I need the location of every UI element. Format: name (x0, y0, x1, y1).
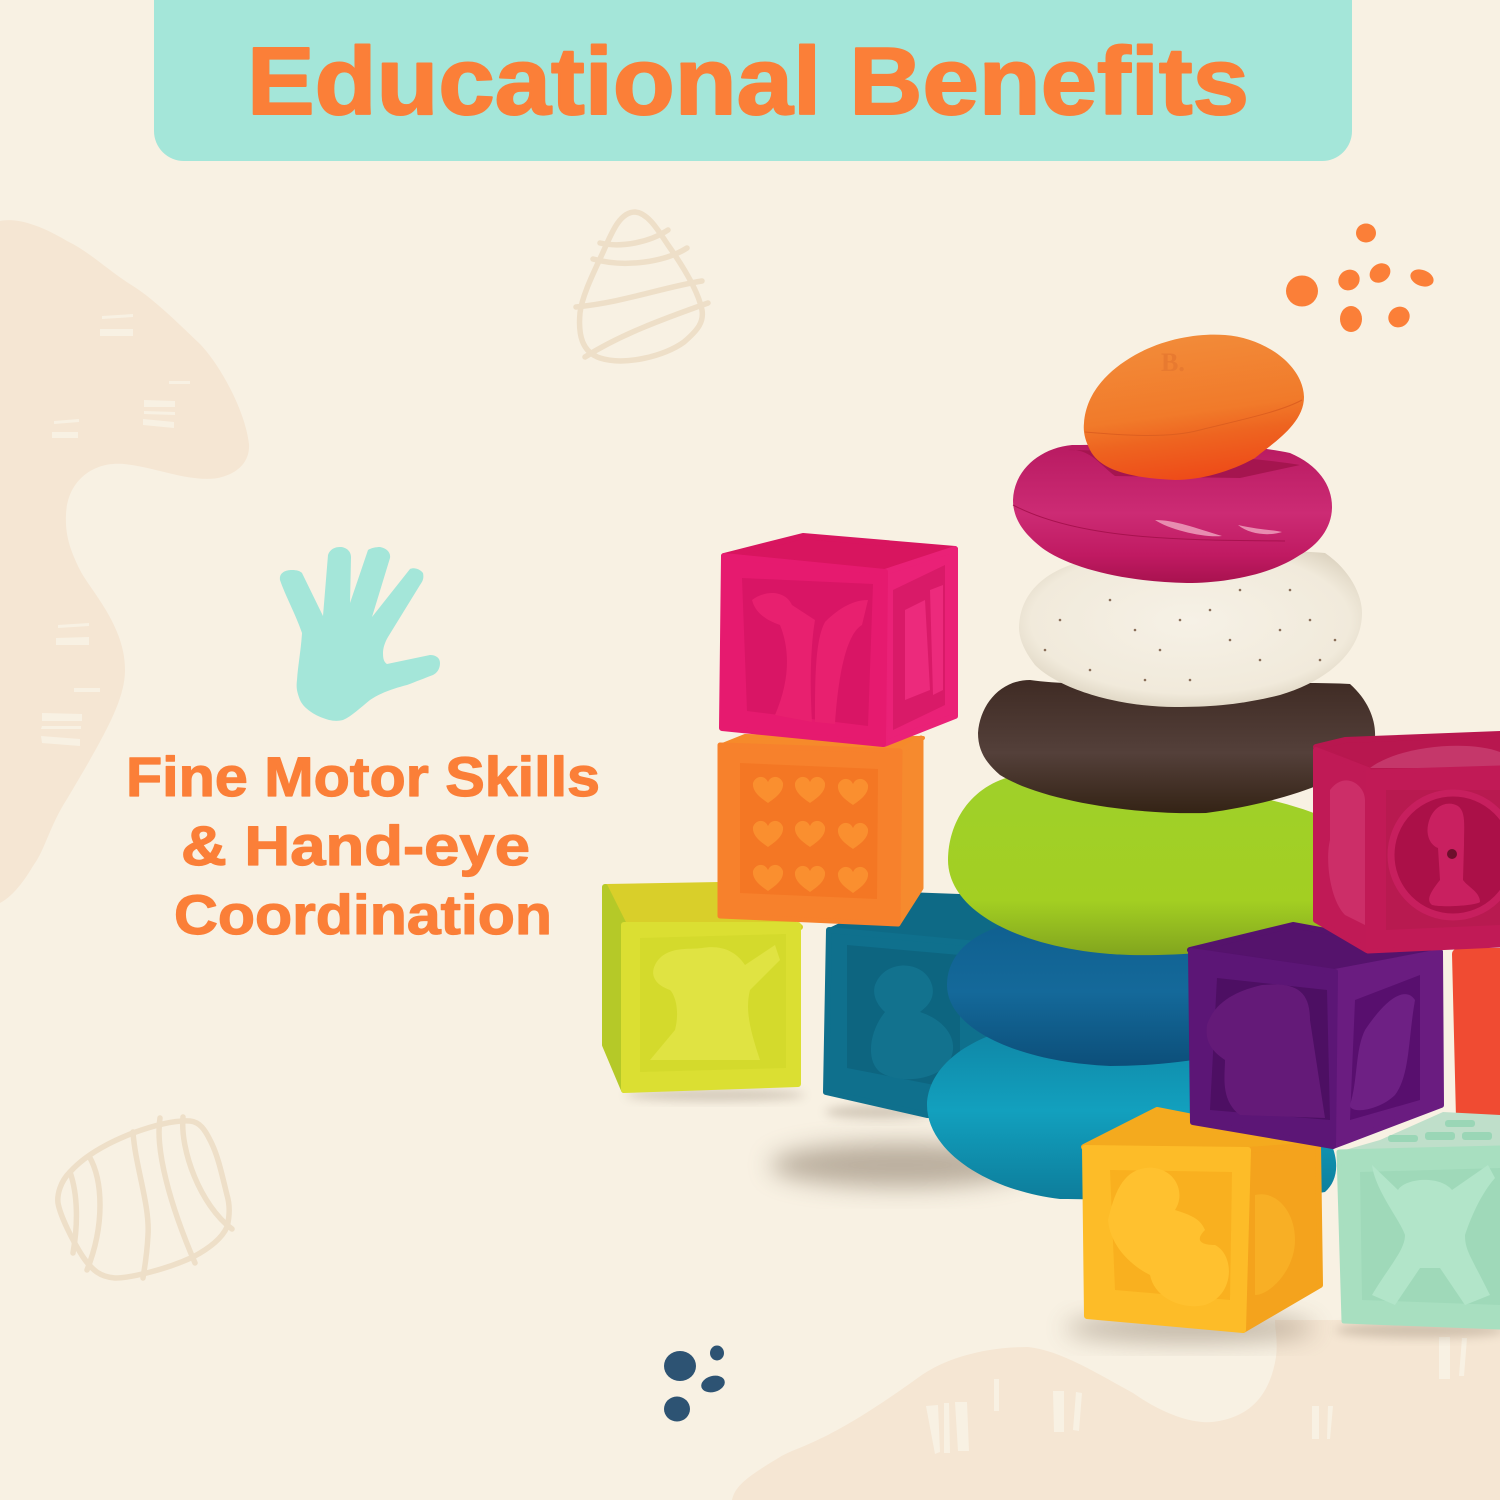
toy: mint bear block (1339, 1112, 1500, 1327)
dots: navy cluster (664, 1346, 727, 1422)
doodle: striped egg (576, 212, 708, 361)
ring: teal (927, 1022, 1336, 1199)
ring: navy (947, 918, 1300, 1066)
ring: orange top stone (1084, 335, 1304, 480)
dots: orange cluster (1286, 224, 1436, 332)
numeral one (1427, 804, 1480, 906)
icon: hand (280, 547, 440, 721)
toy shadows (625, 1089, 1500, 1342)
ring: brown (978, 680, 1375, 813)
header banner (154, 0, 1352, 161)
toy: stacking rings (927, 335, 1375, 1199)
toy: teal monkey block (826, 895, 1040, 1115)
hearts (753, 777, 868, 893)
text: skill label: Fine Motor Skills (126, 745, 600, 808)
toy: purple lion block (1190, 925, 1441, 1146)
blob: left mushroom shape (0, 220, 249, 903)
doodle: striped oval (58, 1117, 232, 1278)
ring: magenta (1013, 444, 1332, 583)
blob: bottom hill (732, 1320, 1500, 1500)
toy: orange hearts block (720, 736, 923, 924)
toy: lime dog block (605, 885, 800, 1090)
text: skill label (126, 745, 600, 946)
toy: yellow duck block (1084, 1110, 1320, 1330)
logo embossed on stone: B. (1161, 348, 1185, 377)
text: skill label: Coordination (174, 883, 552, 946)
ring: speckled white (1019, 551, 1362, 707)
ring: green (948, 773, 1330, 955)
toy: burgundy number block (1316, 734, 1500, 951)
toy: red block (1452, 948, 1500, 1127)
text: skill label: & Hand-eye (181, 814, 530, 877)
title: Educational Benefits (247, 28, 1249, 135)
toy: pink giraffe block (722, 536, 955, 744)
